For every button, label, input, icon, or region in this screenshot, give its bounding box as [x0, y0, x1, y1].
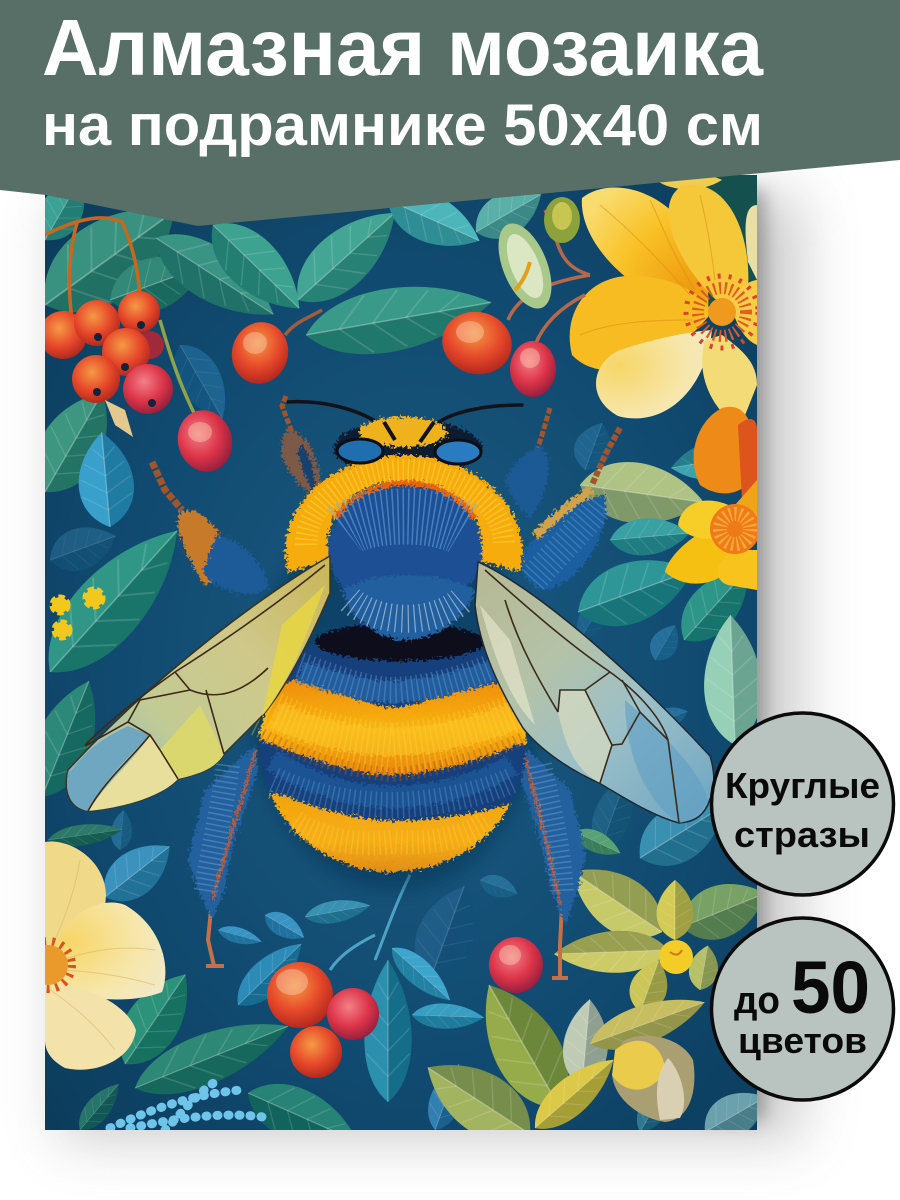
bee: eyes [337, 422, 481, 464]
badge: up to 50 colours: цветов [738, 1020, 867, 1061]
berry stems [45, 210, 590, 970]
foliage: left leaves [45, 399, 178, 902]
badge: round rhinestones [712, 713, 894, 895]
flower: bottom blue sprigs [110, 1082, 270, 1130]
canvas background [45, 175, 757, 1130]
bee: yellow collar [285, 455, 522, 572]
bee: fur strands [205, 470, 600, 895]
title: Алмазная мозаика [42, 3, 763, 92]
badge: round rhinestones: Круглые [725, 765, 880, 806]
flower: right orange [665, 407, 760, 590]
bee: furry body parts [178, 417, 606, 925]
bee shadow [250, 510, 540, 890]
foliage: right leaves [578, 448, 757, 866]
bee: upper legs [178, 430, 606, 593]
flower: bottom left cream [24, 842, 165, 1070]
faint background foliage [43, 334, 691, 990]
bee: abdomen [255, 618, 530, 875]
bee: blue thorax [328, 486, 482, 640]
pale seed pod and green bud [498, 197, 580, 308]
flower: small yellow blossoms [52, 589, 103, 638]
header banner [0, 0, 900, 226]
bee: dark waist [315, 623, 485, 661]
bee: head and eyes [334, 417, 482, 476]
badge: up to 50 colours: до [734, 980, 780, 1022]
title [42, 3, 763, 158]
foliage: bottom right leaves [411, 849, 776, 1159]
bee: left wing [66, 556, 330, 811]
title: на подрамнике 50х40 см [42, 93, 763, 158]
bee: antennae [288, 402, 522, 428]
berries: single fruits [171, 304, 556, 1078]
badge: up to 50 colours: 50 [791, 946, 870, 1029]
canvas artwork [45, 175, 757, 1130]
bee: right wing [475, 562, 714, 823]
canvas drop shadow [60, 190, 802, 1140]
berries: top left cluster [39, 291, 173, 437]
bee: thin leg tips [152, 396, 620, 978]
bee: lower legs [188, 745, 586, 925]
badge: round rhinestones: стразы [734, 814, 870, 855]
flower: bottom right buds [612, 940, 694, 1122]
flower: top right yellow [570, 173, 758, 428]
badge: up to 50 colours [712, 918, 894, 1100]
foliage: bottom leaves [79, 900, 484, 1130]
foliage: top leaves [45, 194, 542, 354]
bee [66, 396, 714, 978]
